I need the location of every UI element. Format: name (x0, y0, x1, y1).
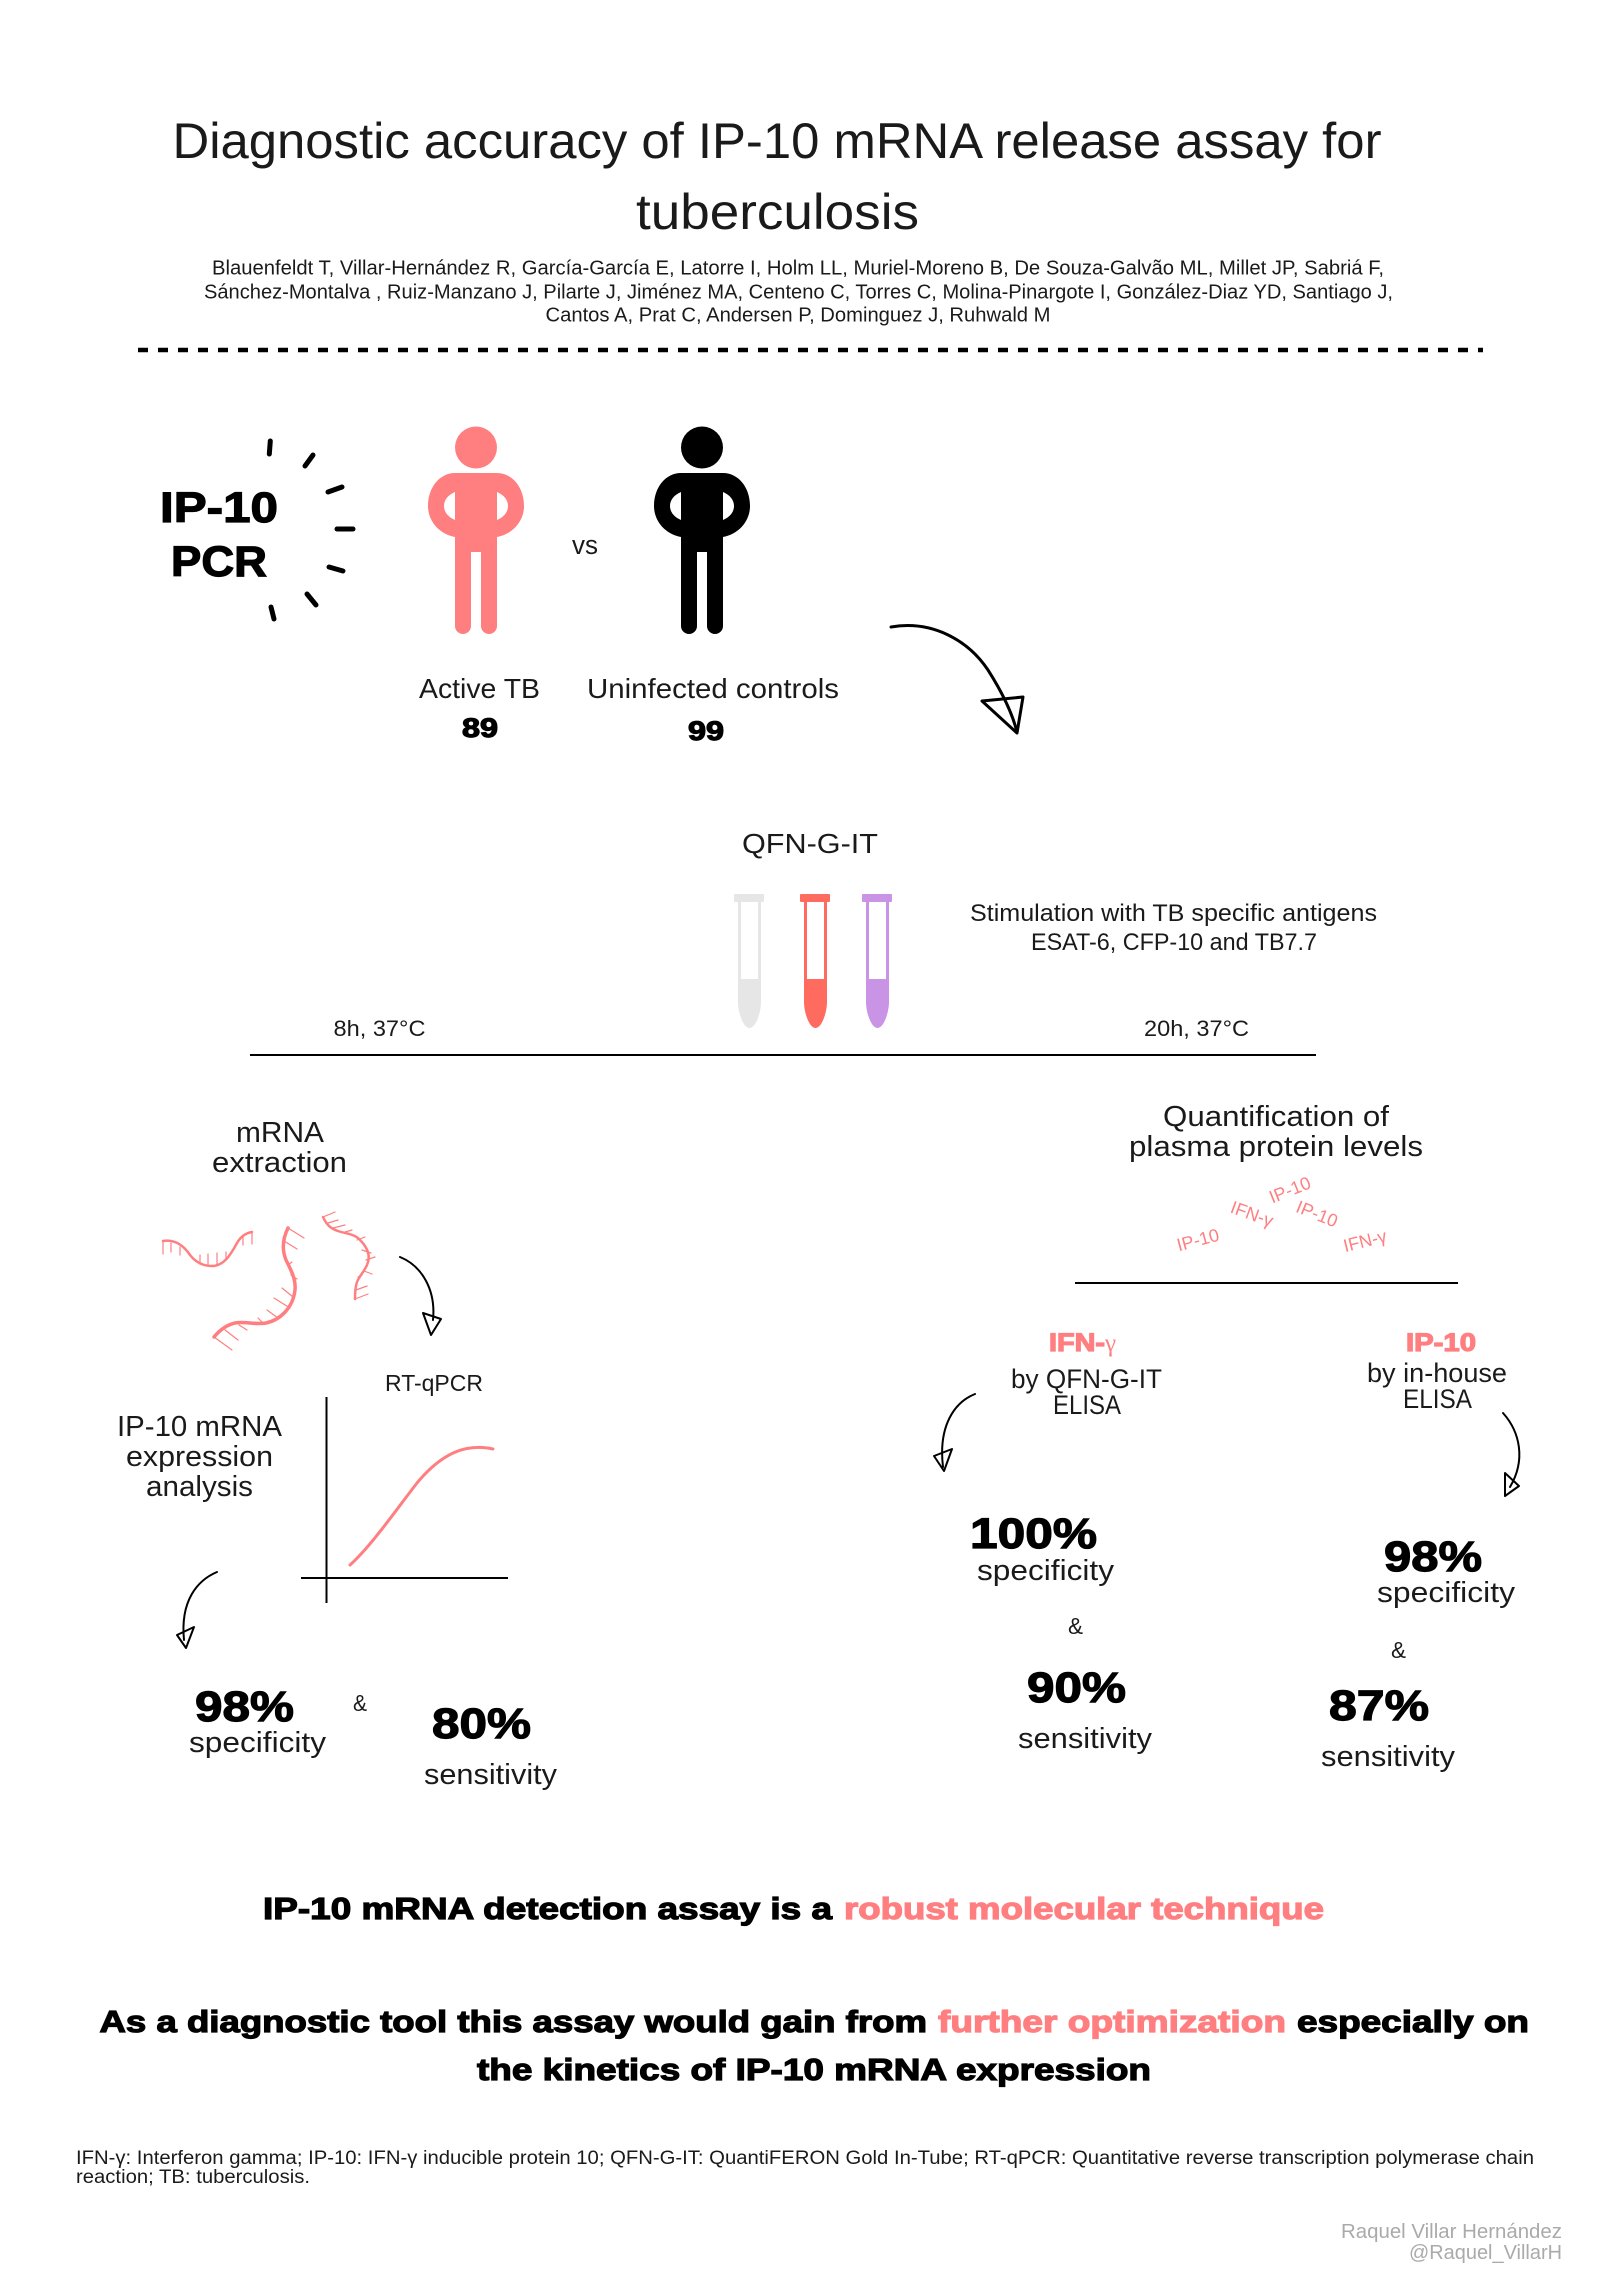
icon: purple tube (862, 894, 892, 1028)
footnote (76, 2148, 1534, 2188)
signature: Raquel Villar Hernández (1341, 2221, 1562, 2243)
icon: floating proteins: IFN-γ (1228, 1197, 1276, 1231)
icon: floating proteins (1175, 1173, 1389, 1256)
icon: floating proteins: IP-10 (1293, 1197, 1341, 1231)
title: Diagnostic accuracy of IP-10 mRNA release assay for (172, 113, 1382, 169)
result: 98% specificity: 98% (195, 1683, 294, 1731)
label: IFN-γ by QFN-G-IT ELISA: by QFN-G-IT (1011, 1364, 1162, 1394)
label: IP-10 by in-house ELISA: by in-house (1367, 1358, 1507, 1388)
label: IP-10 by in-house ELISA: IP-10 (1406, 1329, 1476, 1357)
label: stimulation: ESAT-6, CFP-10 and TB7.7 (1031, 929, 1317, 956)
footnote: IFN-γ: Interferon gamma; IP-10: IFN-γ inducible protein 10; QFN-G-IT: QuantiFERON Gold In-Tube; RT-qPCR: Quantitative reverse transcription polymerase chain (76, 2148, 1534, 2169)
signature (1341, 2221, 1562, 2264)
label: QFN-G-IT: QFN-G-IT (742, 828, 878, 859)
icon: grey tube (734, 894, 764, 1028)
result: 80% sensitivity: 80% (432, 1700, 531, 1748)
result: 100% specificity (970, 1510, 1115, 1587)
icon: active TB person (428, 426, 524, 634)
label: IFN-γ by QFN-G-IT ELISA (1011, 1329, 1162, 1420)
label: Quantification: plasma protein levels (1129, 1131, 1423, 1163)
result: 90% sensitivity (1018, 1664, 1153, 1755)
icon: floating proteins: IP-10 (1175, 1225, 1221, 1255)
label: IP-10 PCR: PCR (171, 538, 267, 586)
label: Active TB 89: Active TB (419, 673, 540, 704)
signature: @Raquel_VillarH (1409, 2242, 1562, 2264)
conclusion 2: As a diagnostic tool this assay would gain from (100, 2004, 927, 2039)
label: Active TB 89: 89 (462, 713, 498, 743)
arrow: to RT-qPCR (400, 1257, 441, 1335)
result: 100% specificity: specificity (977, 1555, 1115, 1587)
label: Uninfected controls 99: 99 (688, 716, 724, 746)
conclusion 1: IP-10 mRNA detection assay is a (263, 1891, 833, 1926)
result: 100% specificity: 100% (970, 1510, 1097, 1558)
arrow: to IFN-γ results (934, 1394, 975, 1471)
authors: Blauenfeldt T, Villar-Hernández R, García-García E, Latorre I, Holm LL, Muriel-Moreno B, De Souza-Galvão ML, Millet JP, Sabriá F, (212, 258, 1384, 280)
result: 98% specificity (189, 1683, 327, 1759)
title: tuberculosis (636, 184, 919, 240)
label: Quantification: Quantification of (1163, 1101, 1390, 1133)
result: 90% sensitivity: sensitivity (1018, 1723, 1153, 1755)
conclusion 2: the kinetics of IP-10 mRNA expression (477, 2052, 1151, 2087)
label: ampersand: & (353, 1690, 367, 1716)
arrow: to IP-10 results (1503, 1413, 1519, 1496)
icon: floating proteins: IFN-γ (1341, 1226, 1389, 1256)
label: IP-10 PCR (160, 484, 278, 586)
arrow: to QFN tubes (891, 626, 1023, 733)
conclusion 1 (263, 1891, 1324, 1926)
conclusion 1: robust molecular technique (844, 1891, 1324, 1926)
label: 8h: 8h, 37°C (334, 1016, 426, 1041)
result: 87% sensitivity (1321, 1682, 1456, 1773)
result: 98% specificity ELISA: specificity (1377, 1577, 1516, 1609)
label: IP-10 mRNA expression analysis: expression (126, 1441, 273, 1473)
conclusion 2 (100, 2004, 1529, 2087)
icon: floating proteins: IP-10 (1266, 1173, 1314, 1207)
label: IFN-γ by QFN-G-IT ELISA: γ (1104, 1330, 1116, 1357)
result: 87% sensitivity: 87% (1329, 1682, 1429, 1730)
label: IP-10 PCR: IP-10 (160, 484, 278, 532)
label: mRNA extraction: mRNA (236, 1117, 325, 1149)
icon: uninfected control person (654, 426, 750, 634)
icon: red tube (800, 894, 830, 1028)
authors: Sánchez-Montalva , Ruiz-Manzano J, Pilarte J, Jiménez MA, Centeno C, Torres C, Molina-Pinargote I, González-Diaz YD, Santiago J, (204, 282, 1393, 304)
title (172, 113, 1382, 240)
conclusion 2: further optimization (938, 2004, 1286, 2039)
label: stimulation (970, 900, 1377, 956)
label: ampersand: & (1391, 1637, 1406, 1663)
chart: RT-qPCR amplification curve (301, 1397, 508, 1603)
label: 20h: 20h, 37°C (1144, 1016, 1249, 1041)
label: IP-10 mRNA expression analysis (117, 1411, 283, 1503)
label: IP-10 by in-house ELISA: ELISA (1403, 1384, 1472, 1414)
result: 98% specificity: specificity (189, 1727, 327, 1759)
label: mRNA extraction (212, 1117, 347, 1179)
label: IP-10 mRNA expression analysis: analysis (146, 1471, 253, 1503)
label: IFN-γ by QFN-G-IT ELISA: ELISA (1053, 1390, 1121, 1420)
result: 90% sensitivity: 90% (1027, 1664, 1126, 1712)
result: 87% sensitivity: sensitivity (1321, 1741, 1456, 1773)
icon: radiating ticks (269, 441, 353, 619)
label: Active TB 89 (419, 673, 540, 743)
label: stimulation: Stimulation with TB specific antigens (970, 900, 1377, 927)
label: ampersand: & (1068, 1613, 1083, 1639)
label: IP-10 by in-house ELISA (1367, 1329, 1507, 1414)
arrow: to left results (177, 1572, 217, 1648)
result: 98% specificity ELISA (1377, 1533, 1516, 1609)
result: 80% sensitivity: sensitivity (424, 1759, 558, 1791)
authors (204, 258, 1393, 326)
icon: mRNA strands (163, 1212, 375, 1350)
label: Uninfected controls 99 (587, 673, 839, 746)
label: IFN-γ by QFN-G-IT ELISA: IFN- (1049, 1329, 1105, 1357)
label: RT-qPCR: RT-qPCR (385, 1370, 483, 1396)
label: Uninfected controls 99: Uninfected controls (587, 673, 839, 704)
label: mRNA extraction: extraction (212, 1147, 347, 1179)
label: vs: vs (572, 530, 598, 560)
result: 80% sensitivity (424, 1700, 558, 1791)
label: IP-10 mRNA expression analysis: IP-10 mRNA (117, 1411, 283, 1443)
conclusion 2: especially on (1297, 2004, 1529, 2039)
footnote: reaction; TB: tuberculosis. (76, 2167, 310, 2188)
authors: Cantos A, Prat C, Andersen P, Dominguez J, Ruhwald M (546, 304, 1050, 326)
result: 98% specificity ELISA: 98% (1384, 1533, 1482, 1581)
label: Quantification (1129, 1101, 1423, 1163)
